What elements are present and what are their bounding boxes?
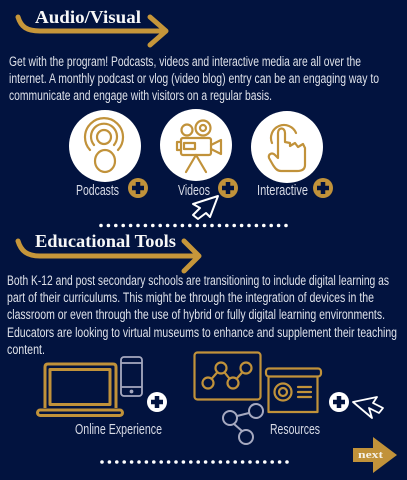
icon: pointing hand bbox=[251, 111, 323, 183]
section: Audio/Visual bbox=[9, 7, 379, 219]
icon: laptop bbox=[38, 364, 122, 416]
icon: cursor bbox=[193, 196, 218, 219]
label: Podcasts: Podcasts bbox=[76, 182, 119, 199]
icon: plus online experience bbox=[147, 392, 167, 412]
text block: Audio/Visual intro bbox=[9, 54, 379, 103]
icon: plus interactive bbox=[313, 178, 333, 198]
icon: cursor resources bbox=[353, 397, 383, 418]
label: Online Experience: Online Experience bbox=[75, 421, 162, 438]
next arrow button bbox=[353, 437, 397, 473]
icon: plus podcasts bbox=[128, 178, 148, 198]
arrow: Educational Tools heading bbox=[18, 241, 199, 271]
icon: plus videos bbox=[218, 178, 238, 198]
icon: line chart monitor bbox=[194, 352, 260, 400]
icon: share nodes bbox=[223, 404, 263, 444]
text block: Educational Tools intro bbox=[7, 273, 397, 357]
icon: video camera bbox=[160, 109, 232, 181]
arrow: Audio/Visual heading bbox=[18, 17, 166, 45]
icon: podcasts bbox=[69, 110, 141, 182]
icon: plus resources bbox=[329, 392, 349, 412]
label: Resources: Resources bbox=[270, 421, 320, 438]
heading: Educational Tools: Educational Tools bbox=[35, 231, 176, 251]
label: Interactive: Interactive bbox=[257, 182, 308, 199]
icon: smartphone bbox=[121, 357, 142, 396]
icon: presentation board bbox=[266, 368, 321, 412]
next arrow button: next bbox=[358, 449, 383, 461]
text block: Audio/Visual intro: communicate and engage with visitors on a regular basis. bbox=[9, 88, 272, 103]
label: Videos: Videos bbox=[178, 182, 210, 199]
text block: Educational Tools intro: content. bbox=[7, 342, 45, 357]
heading: Audio/Visual: Audio/Visual bbox=[35, 7, 141, 27]
section: Educational Tools bbox=[7, 231, 397, 444]
